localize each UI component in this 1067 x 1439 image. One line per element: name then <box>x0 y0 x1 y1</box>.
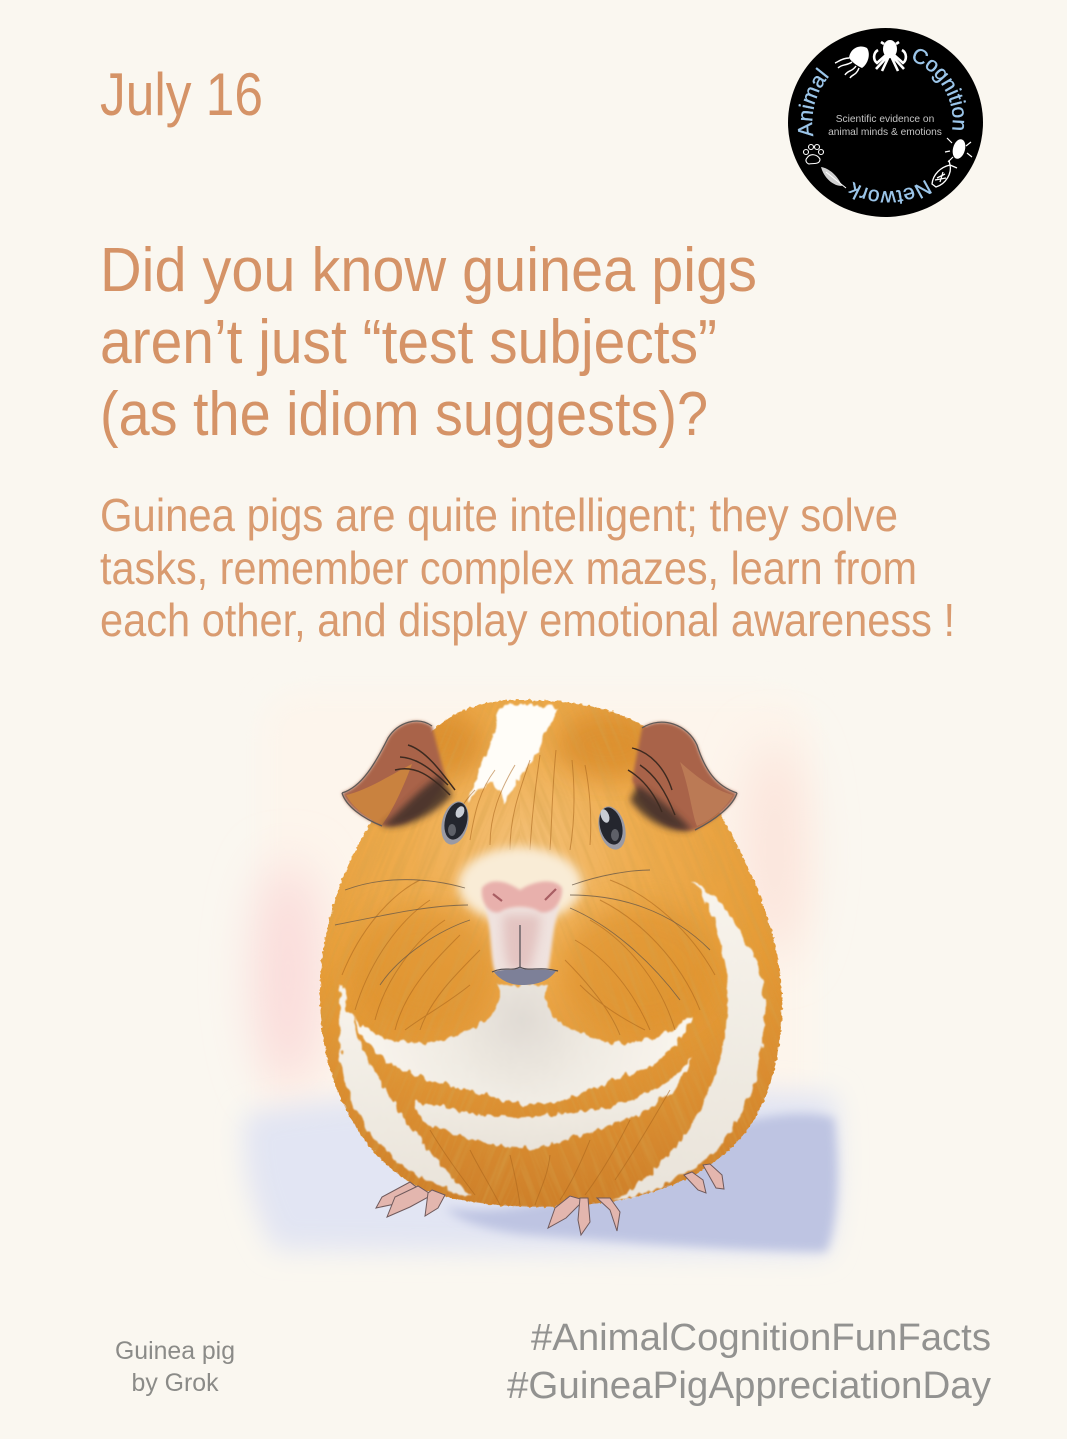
icon: jellyfish <box>835 46 869 78</box>
image caption <box>115 1337 235 1397</box>
left eye <box>437 799 473 847</box>
left stripe <box>338 985 470 1197</box>
body <box>319 698 784 1208</box>
logo ring text: Network <box>848 180 932 204</box>
white fur patches <box>338 704 765 1200</box>
right eye <box>594 804 630 852</box>
headline: (as the idiom suggests)? <box>100 380 708 449</box>
mouth <box>492 925 558 985</box>
right ear <box>628 722 737 831</box>
lower band <box>415 1056 692 1148</box>
front right foot <box>548 1196 620 1235</box>
body text: tasks, remember complex mazes, learn from <box>100 542 917 594</box>
hashtags: #GuineaPigAppreciationDay <box>507 1365 991 1407</box>
logo tagline: Scientific evidence on <box>836 114 934 125</box>
icon: feather <box>821 167 846 188</box>
nose <box>482 881 562 912</box>
icon: fish <box>932 160 957 187</box>
whiskers <box>335 870 710 1000</box>
headline: Did you know guinea pigs <box>100 236 757 305</box>
logo tagline: animal minds & emotions <box>828 127 942 138</box>
hashtags: #AnimalCognitionFunFacts <box>531 1317 991 1359</box>
floor wash and shadow <box>244 1089 838 1255</box>
logo: Animal Cognition Network <box>788 28 983 217</box>
forehead blaze <box>468 704 556 802</box>
icon: paw <box>804 144 824 164</box>
logo tagline <box>828 114 942 138</box>
illustration: guinea pig <box>239 698 846 1262</box>
watercolour backdrop <box>254 692 812 1232</box>
right stripe <box>612 880 765 1200</box>
logo ring text <box>798 48 966 204</box>
fur strokes <box>342 750 715 1205</box>
headline <box>100 236 757 449</box>
headline: aren’t just “test subjects” <box>100 308 717 377</box>
chest bib <box>352 985 692 1105</box>
body text: each other, and display emotional awareness ! <box>100 594 955 646</box>
body text: Guinea pigs are quite intelligent; they solve <box>100 489 898 541</box>
muzzle <box>458 847 582 972</box>
left foot <box>376 1182 445 1217</box>
icon: beetle <box>945 138 972 162</box>
icon: octopus <box>874 40 906 71</box>
body text <box>100 489 955 646</box>
logo ring text: Cognition <box>913 48 966 130</box>
hashtags <box>507 1317 991 1407</box>
back right foot <box>684 1164 724 1193</box>
image caption: Guinea pig <box>115 1337 235 1365</box>
logo ring text: Animal <box>798 67 829 136</box>
date heading: July 16 <box>100 61 263 128</box>
left ear <box>342 721 455 827</box>
image caption: by Grok <box>132 1369 219 1397</box>
